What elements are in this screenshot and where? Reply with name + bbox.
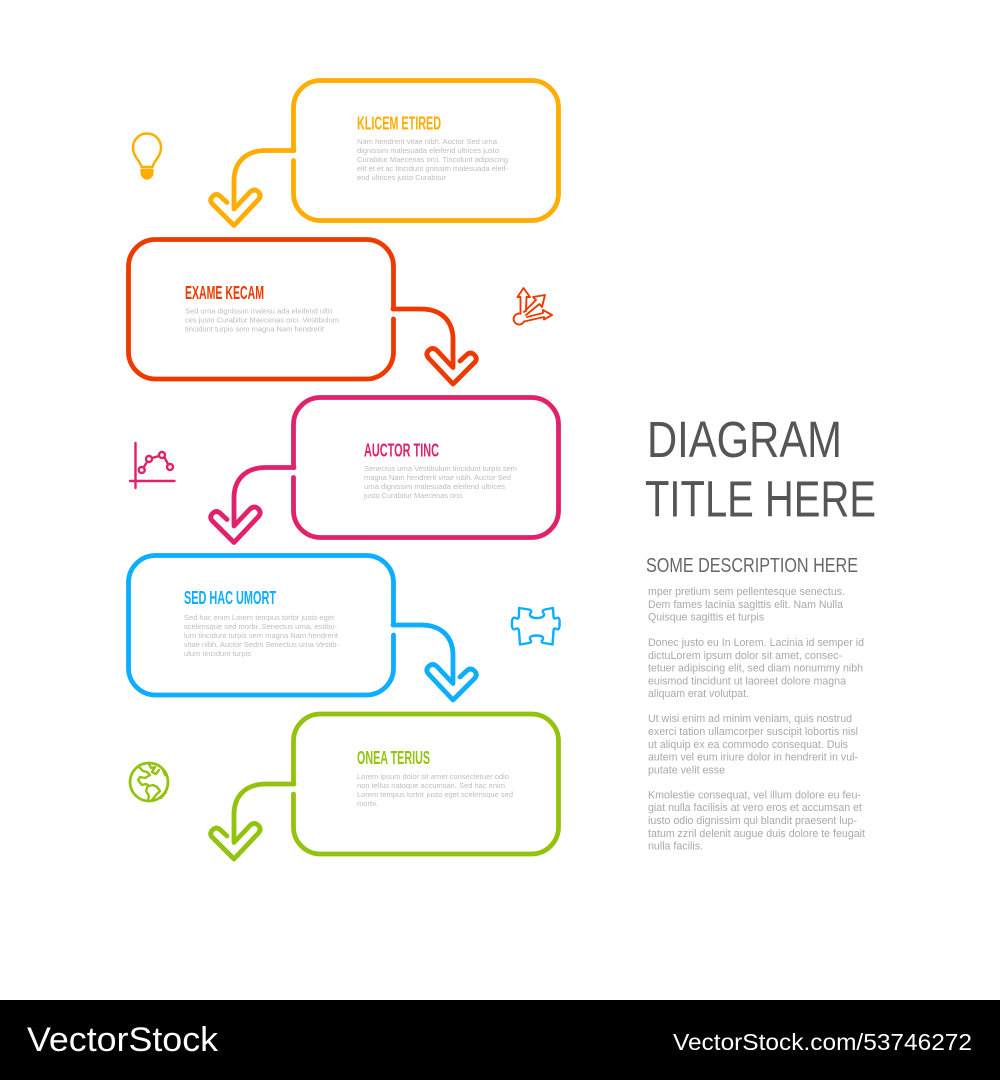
panel: step 4: [128, 556, 476, 700]
text: step 5: Lorem tempus tortor justo eget scelerisque sed: [357, 790, 513, 799]
text: step 1: Curabitur Maecenas orci. Tincidunt adipiscing: [357, 155, 508, 164]
text: step 5: Lorem ipsum dolor sit amet consectetuer odio: [357, 772, 509, 781]
icon: line chart: [130, 443, 174, 488]
text: step 5: morbi.: [357, 799, 378, 808]
description paragraphs: dictuLorem ipsum dolor sit amet, consec-: [648, 650, 842, 662]
text: step 3: justo Curabitur Maecenas orci.: [363, 491, 464, 500]
heading: step 1: KLICEM ETIRED: [357, 114, 441, 134]
text: step 2: Sed urna dignissim malesu ada eleifend ultri: [185, 306, 332, 316]
description paragraphs: tatum zzril delenit augue duis dolore te feugait: [648, 828, 865, 840]
text: step 5: non tellus natoque accumsan. Sed hac enim: [357, 781, 505, 790]
description paragraphs: Ut wisi enim ad minim veniam, quis nostrud: [648, 713, 852, 725]
title: DIAGRAM: [647, 411, 842, 468]
text: step 1: elit et et ac tincidunt gnissim malesuada eleif-: [357, 164, 509, 173]
box outline and arrow: step 4: [128, 556, 476, 700]
footer logo: VectorStock: [27, 1021, 219, 1059]
text: step 2: ces justo Curabitur Maecenas orci. Vestibulum: [185, 316, 339, 324]
description paragraphs: Dem fames lacinia sagittis elit. Nam Nulla: [648, 599, 843, 611]
description paragraphs: Kmolestie consequat, vel illum dolore eu feu-: [648, 790, 861, 802]
icon: puzzle piece: [512, 608, 560, 644]
text: step 3: magna Nam hendrerit vitae nibh. Auctor Sed: [364, 473, 511, 482]
text: step 1: dignissim malesuada eleifend ultrices justo: [357, 146, 499, 155]
heading: step 2: EXAME KECAM: [185, 283, 264, 303]
heading: step 4: SED HAC UMORT: [184, 588, 276, 608]
description paragraphs: euismod tincidunt ut laoreet dolore magna: [648, 676, 846, 688]
text: step 4: Sed hac enim Lorem tempus tortor justo eget: [184, 613, 334, 622]
text: step 2: [185, 306, 339, 334]
description paragraphs: giat nulla facilisis at vero eros et accumsan et: [648, 802, 862, 814]
description paragraphs: exerci tation ullamcorper suscipit lobortis nisl: [648, 726, 858, 738]
text: step 4: lum tincidunt turpis sem magna Nam hendrerit: [184, 631, 338, 640]
panel: step 3: [211, 398, 558, 542]
text: step 2: tincidunt turpis sem magna Nam hendrerit: [185, 324, 324, 334]
panel: step 1: [211, 80, 558, 226]
icon: branching arrows: [514, 288, 552, 325]
subtitle: SOME DESCRIPTION HERE: [646, 554, 858, 577]
box outline and arrow: step 3: [211, 398, 558, 542]
title: TITLE HERE: [645, 470, 876, 528]
box outline and arrow: step 1: [211, 80, 558, 226]
box outline and arrow: step 2: [128, 240, 476, 384]
description paragraphs: aliquam erat volutpat.: [648, 688, 749, 700]
text: step 4: vitae nibh. Auctor Sedm Senectus urna Vestib-: [184, 640, 340, 649]
footer image id: VectorStock.com/53746272: [673, 1029, 972, 1055]
description paragraphs: [648, 586, 865, 852]
description paragraphs: putate velit esse: [648, 764, 725, 776]
description paragraphs: mper pretium sem pellentesque senectus.: [648, 586, 845, 598]
description paragraphs: Quisque sagittis et turpis: [648, 612, 764, 624]
text: step 1: Nam hendrerit vitae nibh. Auctor Sed urna: [357, 137, 498, 146]
footer bar: [0, 1000, 1000, 1080]
text: step 4: ulum tincidunt turpis: [184, 649, 251, 658]
description paragraphs: Donec justo eu In Lorem. Lacinia id semper id: [648, 637, 864, 649]
description paragraphs: tetuer adipiscing elit, sed diam nonummy nibh: [648, 662, 863, 674]
text: step 1: end ultrices justo Curabitur: [357, 173, 447, 182]
text: step 1: [357, 137, 509, 182]
description paragraphs: autem vel eum iriure dolor in hendrerit in vul-: [648, 752, 858, 764]
text: step 5: [357, 772, 513, 808]
text: step 4: [184, 613, 340, 658]
title: [645, 411, 876, 528]
text: step 3: urna dignissim malesuada eleifend ultrices: [364, 482, 505, 491]
panel: step 5: [211, 714, 558, 859]
text: step 3: Senectus urna Vestibulum tincidunt turpis sem: [364, 464, 517, 473]
text: step 3: [363, 464, 517, 500]
icon: light bulb: [133, 134, 161, 178]
box outline and arrow: step 5: [211, 714, 558, 859]
text: step 4: scelerisque sed morbi. Senectus urna. estibu-: [184, 622, 338, 631]
description paragraphs: ut aliquip ex ea commodo consequat. Duis: [648, 739, 848, 751]
panel: step 2: [128, 240, 476, 384]
icon: globe: [130, 763, 168, 801]
description paragraphs: iusto odio dignissim qui blandit praesent lup-: [648, 815, 857, 827]
description paragraphs: nulla facilis.: [648, 840, 703, 852]
heading: step 3: AUCTOR TINC: [364, 440, 439, 460]
heading: step 5: ONEA TERIUS: [357, 748, 430, 768]
